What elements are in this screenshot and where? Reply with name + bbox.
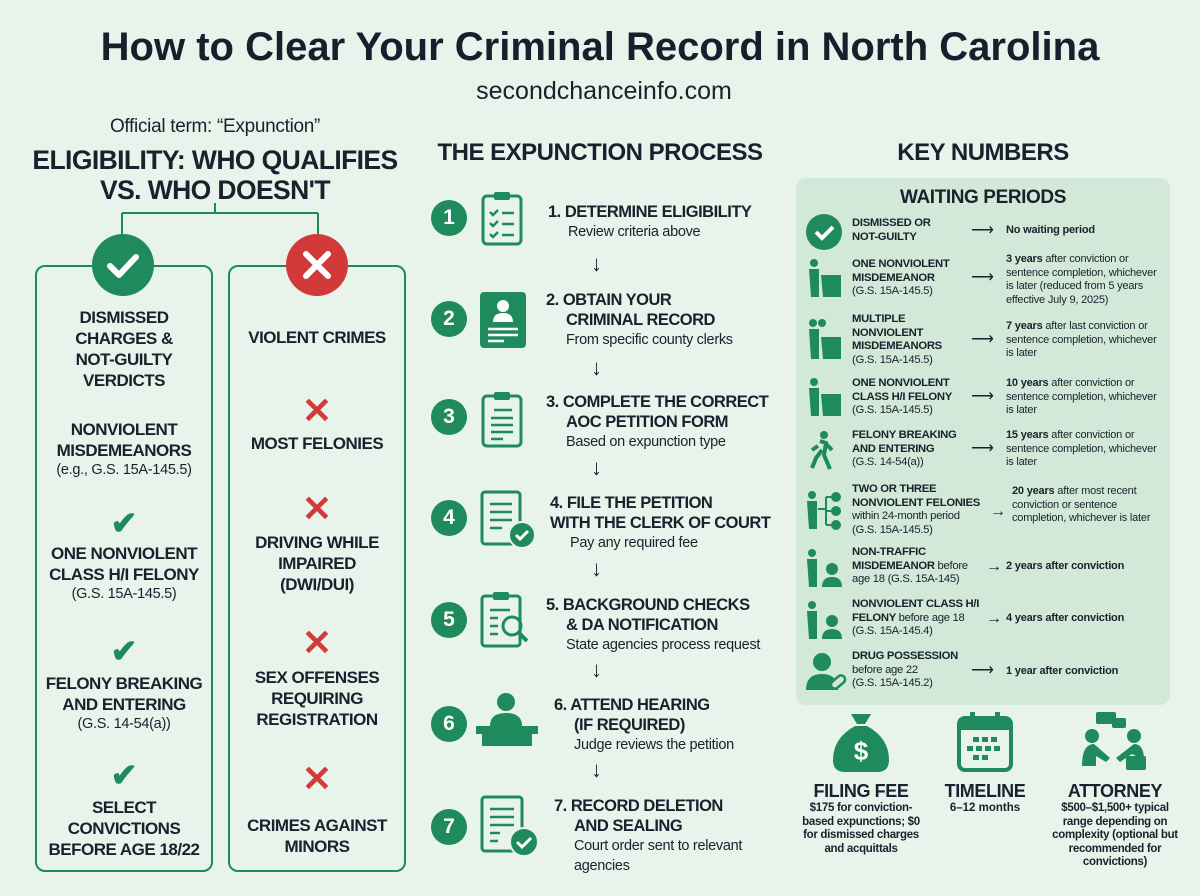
icon: x: ✕ <box>302 622 332 663</box>
row: one felony: CLASS H/I FELONY <box>852 390 952 402</box>
step 2: 2 <box>443 307 455 330</box>
item: sex offenses <box>255 668 380 729</box>
row: dismissed <box>806 214 1095 250</box>
row: one misdemeanor: 3 years after conviction or sentence completion, whichever is later (reduced from 5 years effective July 9, 2025) <box>1006 253 1157 306</box>
item: misdemeanors: NONVIOLENT <box>71 420 177 439</box>
arrow: ↓ <box>591 355 602 380</box>
row: class h/i felony under 18 <box>807 598 1124 639</box>
step 2: 2. OBTAIN YOUR <box>546 291 671 309</box>
step 4: WITH THE CLERK OF COURT <box>550 514 770 532</box>
row: multiple misdemeanors: NONVIOLENT <box>852 326 923 338</box>
step 2 <box>431 291 733 348</box>
step 6 <box>431 693 734 753</box>
row: non-traffic misdemeanor under 18: 2 years after conviction <box>1006 560 1124 572</box>
item: dismissed: CHARGES & <box>75 329 173 348</box>
row: drug possession: DRUG POSSESSION <box>852 650 958 662</box>
stat: filing fee: FILING FEE <box>813 781 908 801</box>
step 3: AOC PETITION FORM <box>566 413 728 431</box>
row: two or three felonies: within 24-month period <box>852 510 960 522</box>
row: multiple misdemeanors: ⟶ <box>971 331 994 348</box>
row: two or three felonies: (G.S. 15A-145.5) <box>852 524 933 536</box>
row: drug possession: 1 year after conviction <box>1006 665 1118 677</box>
stat: filing fee <box>802 714 920 854</box>
step 2: From specific county clerks <box>566 332 733 348</box>
row: breaking and entering: ⟶ <box>971 440 994 457</box>
step 3: Based on expunction type <box>566 434 726 450</box>
step 5: 5 <box>443 608 455 631</box>
item: misdemeanors <box>56 420 192 478</box>
row: one felony: ONE NONVIOLENT <box>852 377 949 389</box>
row: dismissed: ⟶ <box>971 222 994 239</box>
stat: timeline <box>944 712 1026 814</box>
arrow: ↓ <box>591 251 602 276</box>
panel: who qualifies <box>35 265 213 872</box>
item: dismissed: NOT-GUILTY <box>76 350 172 369</box>
stat: filing fee: $ <box>854 736 869 766</box>
step 1: 1. DETERMINE ELIGIBILITY <box>548 203 751 221</box>
step 5: 5. BACKGROUND CHECKS <box>546 596 750 614</box>
row: drug possession: before age 22 <box>852 664 918 676</box>
row: two or three felonies <box>807 483 1150 536</box>
item: breaking and entering <box>46 674 202 732</box>
step 7: agencies <box>574 858 630 874</box>
icon: check: ✔ <box>111 757 137 793</box>
item: dwi <box>255 533 379 594</box>
item: crimes against minors: MINORS <box>284 837 350 856</box>
arrow: ↓ <box>591 455 602 480</box>
row: multiple misdemeanors: MISDEMEANORS <box>852 340 942 352</box>
row: dismissed: No waiting period <box>1006 224 1095 236</box>
arrow: ↓ <box>591 556 602 581</box>
step 5: & DA NOTIFICATION <box>566 616 718 634</box>
row: breaking and entering <box>810 429 1157 470</box>
item: select convictions <box>48 798 200 859</box>
row: one felony <box>809 377 1157 416</box>
item: dismissed <box>75 308 173 390</box>
row: non-traffic misdemeanor under 18: NON-TRAFFIC <box>852 546 926 558</box>
item: breaking and entering: (G.S. 14-54(a)) <box>78 716 170 732</box>
item: dwi: IMPAIRED <box>278 554 356 573</box>
row: non-traffic misdemeanor under 18: MISDEMEANOR before <box>852 560 968 572</box>
step 1: Review criteria above <box>568 224 700 240</box>
row: one misdemeanor: ⟶ <box>971 269 994 286</box>
row: breaking and entering: AND ENTERING <box>852 442 934 454</box>
item: dismissed: DISMISSED <box>79 308 169 327</box>
row: class h/i felony under 18: (G.S. 15A-145.4) <box>852 625 933 637</box>
icon: green check circle <box>92 234 154 296</box>
row: class h/i felony under 18: → <box>986 610 1002 627</box>
title: How to Clear Your Criminal Record in North Carolina <box>101 25 1099 69</box>
step 6: Judge reviews the petition <box>574 737 734 753</box>
row: multiple misdemeanors: 7 years after last conviction or sentence completion, whichever is later <box>1006 320 1157 359</box>
heading: eligibility: ELIGIBILITY: WHO QUALIFIES <box>32 145 398 175</box>
icon: check: ✔ <box>111 505 137 541</box>
step 4: Pay any required fee <box>570 535 698 551</box>
step 7: 7. RECORD DELETION <box>554 797 723 815</box>
stat: attorney: $500–$1,500+ typical range depending on complexity (optional but recommended for convictions) <box>1052 802 1178 868</box>
subtitle: secondchanceinfo.com <box>476 77 732 105</box>
panel: waiting periods <box>796 178 1170 705</box>
item: select convictions: BEFORE AGE 18/22 <box>48 840 200 859</box>
icon: x: ✕ <box>302 758 332 799</box>
row: class h/i felony under 18: 4 years after conviction <box>1006 612 1124 624</box>
step 5 <box>431 592 760 653</box>
step 3 <box>431 392 769 450</box>
step 7: Court order sent to relevant <box>574 838 742 854</box>
heading: eligibility: VS. WHO DOESN'T <box>100 175 330 205</box>
item: felony h/i <box>49 544 199 602</box>
arrow: ↓ <box>591 757 602 782</box>
step 7 <box>431 796 742 874</box>
item: dismissed: VERDICTS <box>83 371 165 390</box>
heading: key numbers: KEY NUMBERS <box>897 139 1069 166</box>
row: one felony: 10 years after conviction or sentence completion, whichever is later <box>1006 377 1157 416</box>
icon: x: ✕ <box>302 390 332 431</box>
item: felony h/i: CLASS H/I FELONY <box>49 565 199 584</box>
step 3: 3 <box>443 405 455 428</box>
step 6: (IF REQUIRED) <box>574 716 685 734</box>
step 7: AND SEALING <box>574 817 682 835</box>
item: felony h/i: (G.S. 15A-145.5) <box>72 586 176 602</box>
row: breaking and entering: 15 years after conviction or sentence completion, whichever is later <box>1006 429 1157 468</box>
row: breaking and entering: FELONY BREAKING <box>852 429 957 441</box>
row: non-traffic misdemeanor under 18: → <box>986 558 1002 575</box>
item: crimes against minors: CRIMES AGAINST <box>247 816 387 835</box>
item: sex offenses: SEX OFFENSES <box>255 668 379 687</box>
step 1: 1 <box>443 206 455 229</box>
row: non-traffic misdemeanor under 18: age 18 (G.S. 15A-145) <box>852 573 959 585</box>
step 4: 4. FILE THE PETITION <box>550 494 712 512</box>
item: violent crimes: VIOLENT CRIMES <box>248 328 386 347</box>
step 3: 3. COMPLETE THE CORRECT <box>546 393 768 411</box>
item: most felonies: MOST FELONIES <box>251 434 383 453</box>
stat: timeline: TIMELINE <box>945 781 1025 801</box>
step 5: State agencies process request <box>566 637 760 653</box>
text: WAITING PERIODS <box>900 187 1066 208</box>
icon: red x circle <box>286 234 348 296</box>
row: drug possession <box>806 650 1118 690</box>
item: dwi: (DWI/DUI) <box>280 575 354 594</box>
row: two or three felonies: → <box>990 503 1006 520</box>
row: non-traffic misdemeanor under 18 <box>807 546 1124 587</box>
row: one misdemeanor: MISDEMEANOR <box>852 272 935 284</box>
step 7: 7 <box>443 815 455 838</box>
row: two or three felonies: TWO OR THREE <box>852 483 936 495</box>
item: dwi: DRIVING WHILE <box>255 533 379 552</box>
item: breaking and entering: AND ENTERING <box>62 695 186 714</box>
row: one misdemeanor: ONE NONVIOLENT <box>852 258 949 270</box>
heading: eligibility <box>32 145 398 205</box>
row: dismissed: NOT-GUILTY <box>852 230 917 242</box>
icon: x: ✕ <box>302 488 332 529</box>
item: sex offenses: REQUIRING <box>271 689 363 708</box>
row: two or three felonies: NONVIOLENT FELONIES <box>852 496 980 508</box>
panel: who doesn't <box>228 265 406 872</box>
step 4: 4 <box>443 506 455 529</box>
item: breaking and entering: FELONY BREAKING <box>46 674 202 693</box>
item: misdemeanors: MISDEMEANORS <box>57 441 191 460</box>
stat: attorney: ATTORNEY <box>1068 781 1162 801</box>
row: one felony: ⟶ <box>971 388 994 405</box>
row: one misdemeanor <box>809 253 1157 306</box>
official term: Official term: “Expunction” <box>110 116 320 137</box>
row: multiple misdemeanors <box>809 313 1157 366</box>
arrow: ↓ <box>591 657 602 682</box>
row: breaking and entering: (G.S. 14-54(a)) <box>852 456 923 468</box>
item: select convictions: SELECT <box>92 798 156 817</box>
step 4 <box>431 490 771 551</box>
row: one felony: (G.S. 15A-145.5) <box>852 404 933 416</box>
stat: filing fee: $175 for conviction-based expunctions; $0 for dismissed charges and acquittals <box>802 802 920 854</box>
row: dismissed: DISMISSED OR <box>852 217 931 229</box>
step 2: CRIMINAL RECORD <box>566 311 715 329</box>
row: class h/i felony under 18: NONVIOLENT CLASS H/I <box>852 598 979 610</box>
row: class h/i felony under 18: FELONY before age 18 <box>852 612 964 624</box>
row: two or three felonies: 20 years after most recent conviction or sentence completion, whichever is later <box>1012 485 1150 524</box>
heading: process: THE EXPUNCTION PROCESS <box>437 139 763 166</box>
icon: check: ✔ <box>111 633 137 669</box>
item: misdemeanors: (e.g., G.S. 15A-145.5) <box>56 462 192 478</box>
stat: attorney <box>1052 712 1178 868</box>
stat: timeline: 6–12 months <box>950 802 1020 814</box>
row: drug possession: ⟶ <box>971 662 994 679</box>
item: sex offenses: REGISTRATION <box>256 710 378 729</box>
item: select convictions: CONVICTIONS <box>68 819 180 838</box>
item: crimes against minors <box>247 816 388 856</box>
item: felony h/i: ONE NONVIOLENT <box>51 544 197 563</box>
step 1 <box>431 192 752 246</box>
row: multiple misdemeanors: MULTIPLE <box>852 313 905 325</box>
row: drug possession: (G.S. 15A-145.2) <box>852 677 933 689</box>
row: one misdemeanor: (G.S. 15A-145.5) <box>852 285 933 297</box>
row: multiple misdemeanors: (G.S. 15A-145.5) <box>852 354 933 366</box>
step 6: 6 <box>443 712 455 735</box>
step 6: 6. ATTEND HEARING <box>554 696 710 714</box>
